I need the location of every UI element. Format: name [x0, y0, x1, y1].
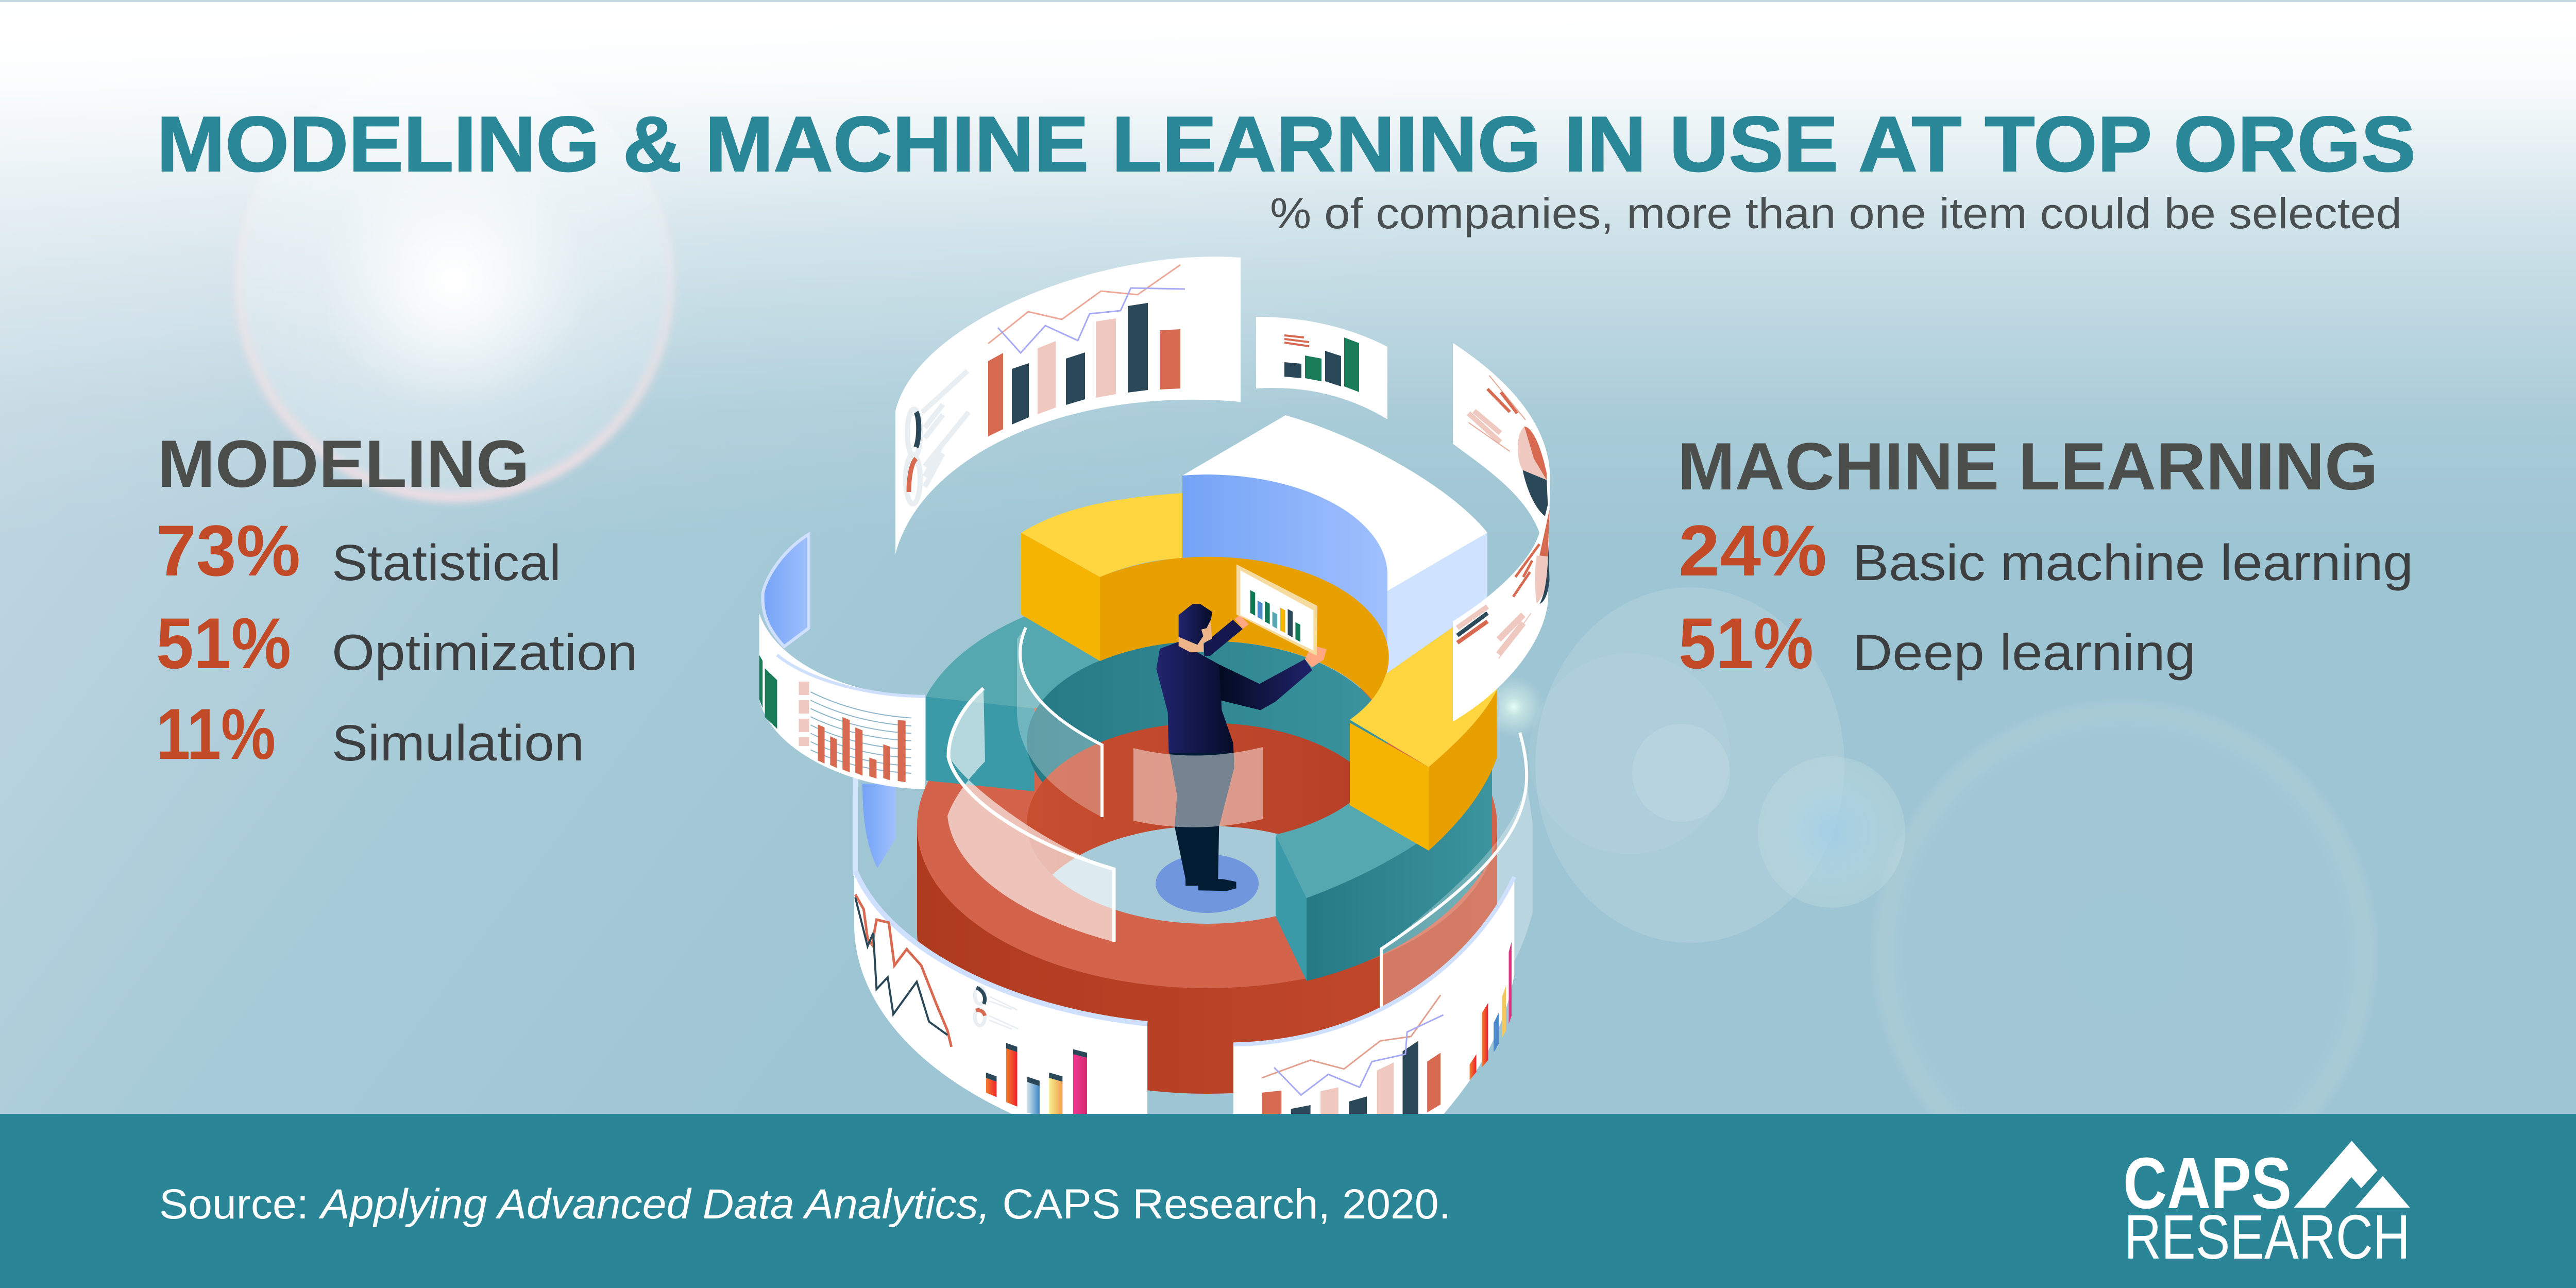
pie chart lower	[1535, 510, 1550, 604]
glass: inner back-left	[1017, 628, 1102, 817]
panel: left curved bar chart band	[759, 614, 925, 789]
title: MODELING & MACHINE LEARNING IN USE AT TOP ORGS	[157, 100, 2416, 188]
line chart	[1262, 995, 1444, 1095]
footer bar	[0, 1114, 2576, 1288]
lens flare: sun ring	[238, 64, 671, 497]
glass: front-right	[1381, 733, 1533, 1081]
right arm raised	[1219, 659, 1312, 710]
red base ring	[917, 664, 1497, 1094]
glass edge: inner back-left	[1020, 628, 1102, 817]
stat: 24% basic machine learning	[1679, 510, 2413, 591]
panel: machine learning statistics	[1677, 429, 2413, 684]
gradient bars	[986, 1043, 1087, 1116]
stat: 51% optimization: 51%	[156, 603, 291, 684]
yellow block: back	[1021, 493, 1389, 700]
person base disc	[1156, 854, 1259, 913]
teal ring inner wall	[1027, 641, 1387, 842]
panel: back-left blue glass	[763, 534, 809, 647]
stat: 24% basic machine learning: Basic machine learning	[1853, 534, 2413, 591]
neck	[1179, 637, 1204, 652]
logo word: CAPS: CAPS	[2123, 1142, 2292, 1224]
logo icon: mountains	[2294, 1141, 2410, 1208]
stat: 11% simulation	[156, 693, 584, 774]
donut charts	[975, 987, 1019, 1029]
glass: centre	[1133, 747, 1263, 827]
stat: 11% simulation: 11%	[156, 693, 276, 774]
heading: machine learning: MACHINE LEARNING	[1677, 429, 2378, 504]
top edge highlight	[777, 655, 925, 697]
trousers and shoes	[1170, 740, 1236, 891]
panel: modeling statistics	[156, 426, 638, 774]
yellow block: front right	[1350, 597, 1497, 851]
grid lines	[810, 692, 911, 773]
heading: modeling: MODELING	[158, 426, 530, 501]
stat: 11% simulation: Simulation	[332, 715, 584, 771]
stat: 73% statistical: Statistical	[332, 534, 561, 591]
lens flare: sun glow	[232, 58, 677, 503]
teal block: front right	[1276, 752, 1492, 981]
teal ring: back left segment	[926, 584, 1207, 791]
line chart	[855, 894, 952, 1047]
bar chart	[1262, 1041, 1440, 1116]
subtitle: % of companies, more than one item could be selected	[1270, 189, 2402, 238]
centre floor	[1052, 826, 1333, 924]
stat: 51% optimization	[156, 603, 638, 684]
stat: 73% statistical	[156, 510, 561, 591]
hand-held chart screen	[1236, 564, 1317, 656]
data lines on right band	[1458, 376, 1539, 658]
stat: 51% optimization: Optimization	[332, 624, 638, 681]
top edge highlight	[1233, 877, 1514, 1044]
panel: curved top chart screen	[895, 257, 1241, 554]
stat: 51% deep learning: Deep learning	[1853, 624, 2196, 681]
torso	[1156, 642, 1233, 753]
donut charts: top screen	[906, 371, 969, 504]
glass: front-left	[947, 688, 1114, 942]
logo word: RESEARCH: RESEARCH	[2124, 1202, 2410, 1272]
glass edge: front-right	[1381, 733, 1527, 1081]
hands	[1235, 615, 1327, 668]
logo: CAPS Research	[2123, 1141, 2410, 1272]
hair	[1179, 604, 1212, 645]
panel: right curved data band	[1453, 343, 1550, 722]
panel: lower-left blue glass	[855, 778, 896, 876]
blue block	[1182, 415, 1487, 674]
bar chart: top screen	[988, 265, 1185, 436]
glass edge: front-left	[948, 688, 1114, 942]
panel: lower-right curved chart band	[1233, 877, 1514, 1116]
3D ring chart	[917, 415, 1497, 1094]
lens flares: right rings	[1483, 587, 2381, 1209]
stat: 24% basic machine learning: 24%	[1679, 510, 1827, 591]
panel: lower-left curved chart band	[854, 871, 1147, 1116]
orange bars	[818, 717, 906, 782]
green bars	[759, 655, 777, 729]
panel: small top bar chart screen	[1256, 317, 1387, 419]
source citation: Source: Applying Advanced Data Analytics, CAPS Research, 2020.	[159, 1181, 1451, 1228]
stat: 51% deep learning: 51%	[1679, 603, 1814, 684]
top edge highlight	[855, 871, 1147, 1024]
person looking at a chart	[1156, 564, 1327, 891]
pie chart upper	[1518, 427, 1548, 516]
small gradient bars	[1470, 942, 1512, 1080]
stat: 51% deep learning	[1679, 603, 2196, 684]
hatch stripes	[799, 682, 809, 746]
stat: 73% statistical: 73%	[156, 510, 300, 591]
red ring inner wall	[1027, 723, 1387, 924]
left arm raised	[1204, 620, 1243, 656]
face	[1197, 618, 1212, 645]
